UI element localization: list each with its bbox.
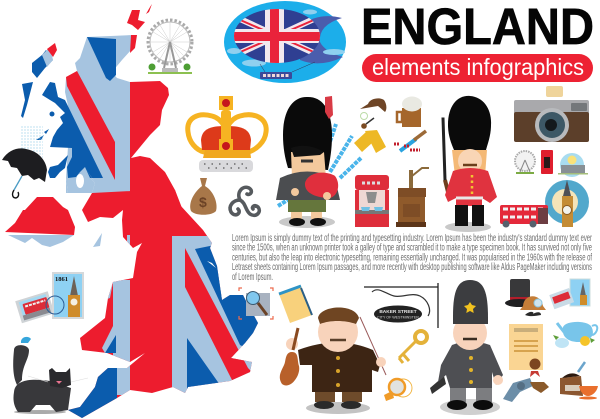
icon: bloody knife	[394, 131, 426, 151]
icon: phone box	[541, 150, 553, 174]
icon: golden key	[399, 331, 427, 363]
text block: lorem ipsum paragraph	[232, 233, 592, 283]
icon: postage stamps with Big Ben and bus: 1861	[55, 276, 68, 283]
icon: stamps small	[549, 279, 590, 309]
icon: pipe	[360, 112, 374, 129]
icon: postage stamps with Big Ben and bus	[15, 272, 84, 323]
icon: gold bars	[354, 130, 386, 153]
icon: black cat with bird	[13, 337, 88, 414]
icon: crown	[188, 96, 266, 172]
figure: Sherlock Holmes with violin	[280, 307, 386, 414]
icon: ferris wheel	[148, 20, 192, 74]
bagpipe drones	[278, 124, 361, 206]
figure: bagpiper	[276, 96, 361, 228]
icon: coffee machine	[355, 175, 389, 227]
Northern Ireland	[5, 197, 75, 247]
icon: money bag	[190, 178, 217, 215]
icon: document with rosette	[509, 324, 543, 377]
icon: coffee bag and cup	[560, 362, 598, 400]
violin	[280, 328, 299, 385]
clouds	[227, 10, 345, 66]
Isle of Man	[93, 233, 102, 247]
badge: airship	[224, 1, 346, 83]
airship tail	[300, 16, 343, 63]
icon: magnifier	[239, 288, 273, 319]
icon: rain	[20, 125, 43, 158]
icon: small ferris wheel	[515, 151, 535, 174]
icon: beer mug	[397, 96, 422, 127]
England and Wales flag section	[68, 190, 258, 418]
figure: royal guard	[442, 96, 497, 232]
balloon flag	[234, 9, 320, 63]
icon: teapot and tea	[553, 322, 597, 348]
gondola	[260, 62, 315, 79]
icon: triskele	[230, 187, 259, 215]
Orkney and Shetland islands	[127, 4, 152, 30]
icon: stonehenge	[558, 153, 588, 177]
icon: double decker bus	[500, 205, 548, 228]
icon: deerstalker hat	[360, 98, 386, 112]
icon: money bag: $	[199, 194, 207, 210]
icon: camera	[514, 86, 589, 142]
subtitle banner: elements infographics	[372, 54, 584, 80]
Hebrides islands	[21, 43, 57, 140]
icon: revolver	[503, 378, 549, 402]
icon: Baker Street sign: BAKER STREET	[379, 309, 417, 315]
icon: Baker Street sign: CITY OF WESTMINSTER	[377, 316, 419, 320]
Scotland flag section	[42, 35, 182, 215]
icon: notepad	[279, 286, 312, 323]
icon: umbrella	[2, 148, 47, 198]
map of Britain with Union Jack	[5, 4, 258, 418]
icon: coffee grinder	[396, 168, 429, 227]
icon: top hat, bowler and moustache	[505, 279, 546, 316]
text block: lorem ipsum paragraph: of Lorem Ipsum.	[232, 272, 273, 283]
icon: Baker Street sign	[364, 283, 438, 328]
icon: pocket watch	[384, 379, 412, 401]
figure: policeman	[430, 280, 503, 415]
icon: Big Ben badge	[545, 180, 589, 227]
